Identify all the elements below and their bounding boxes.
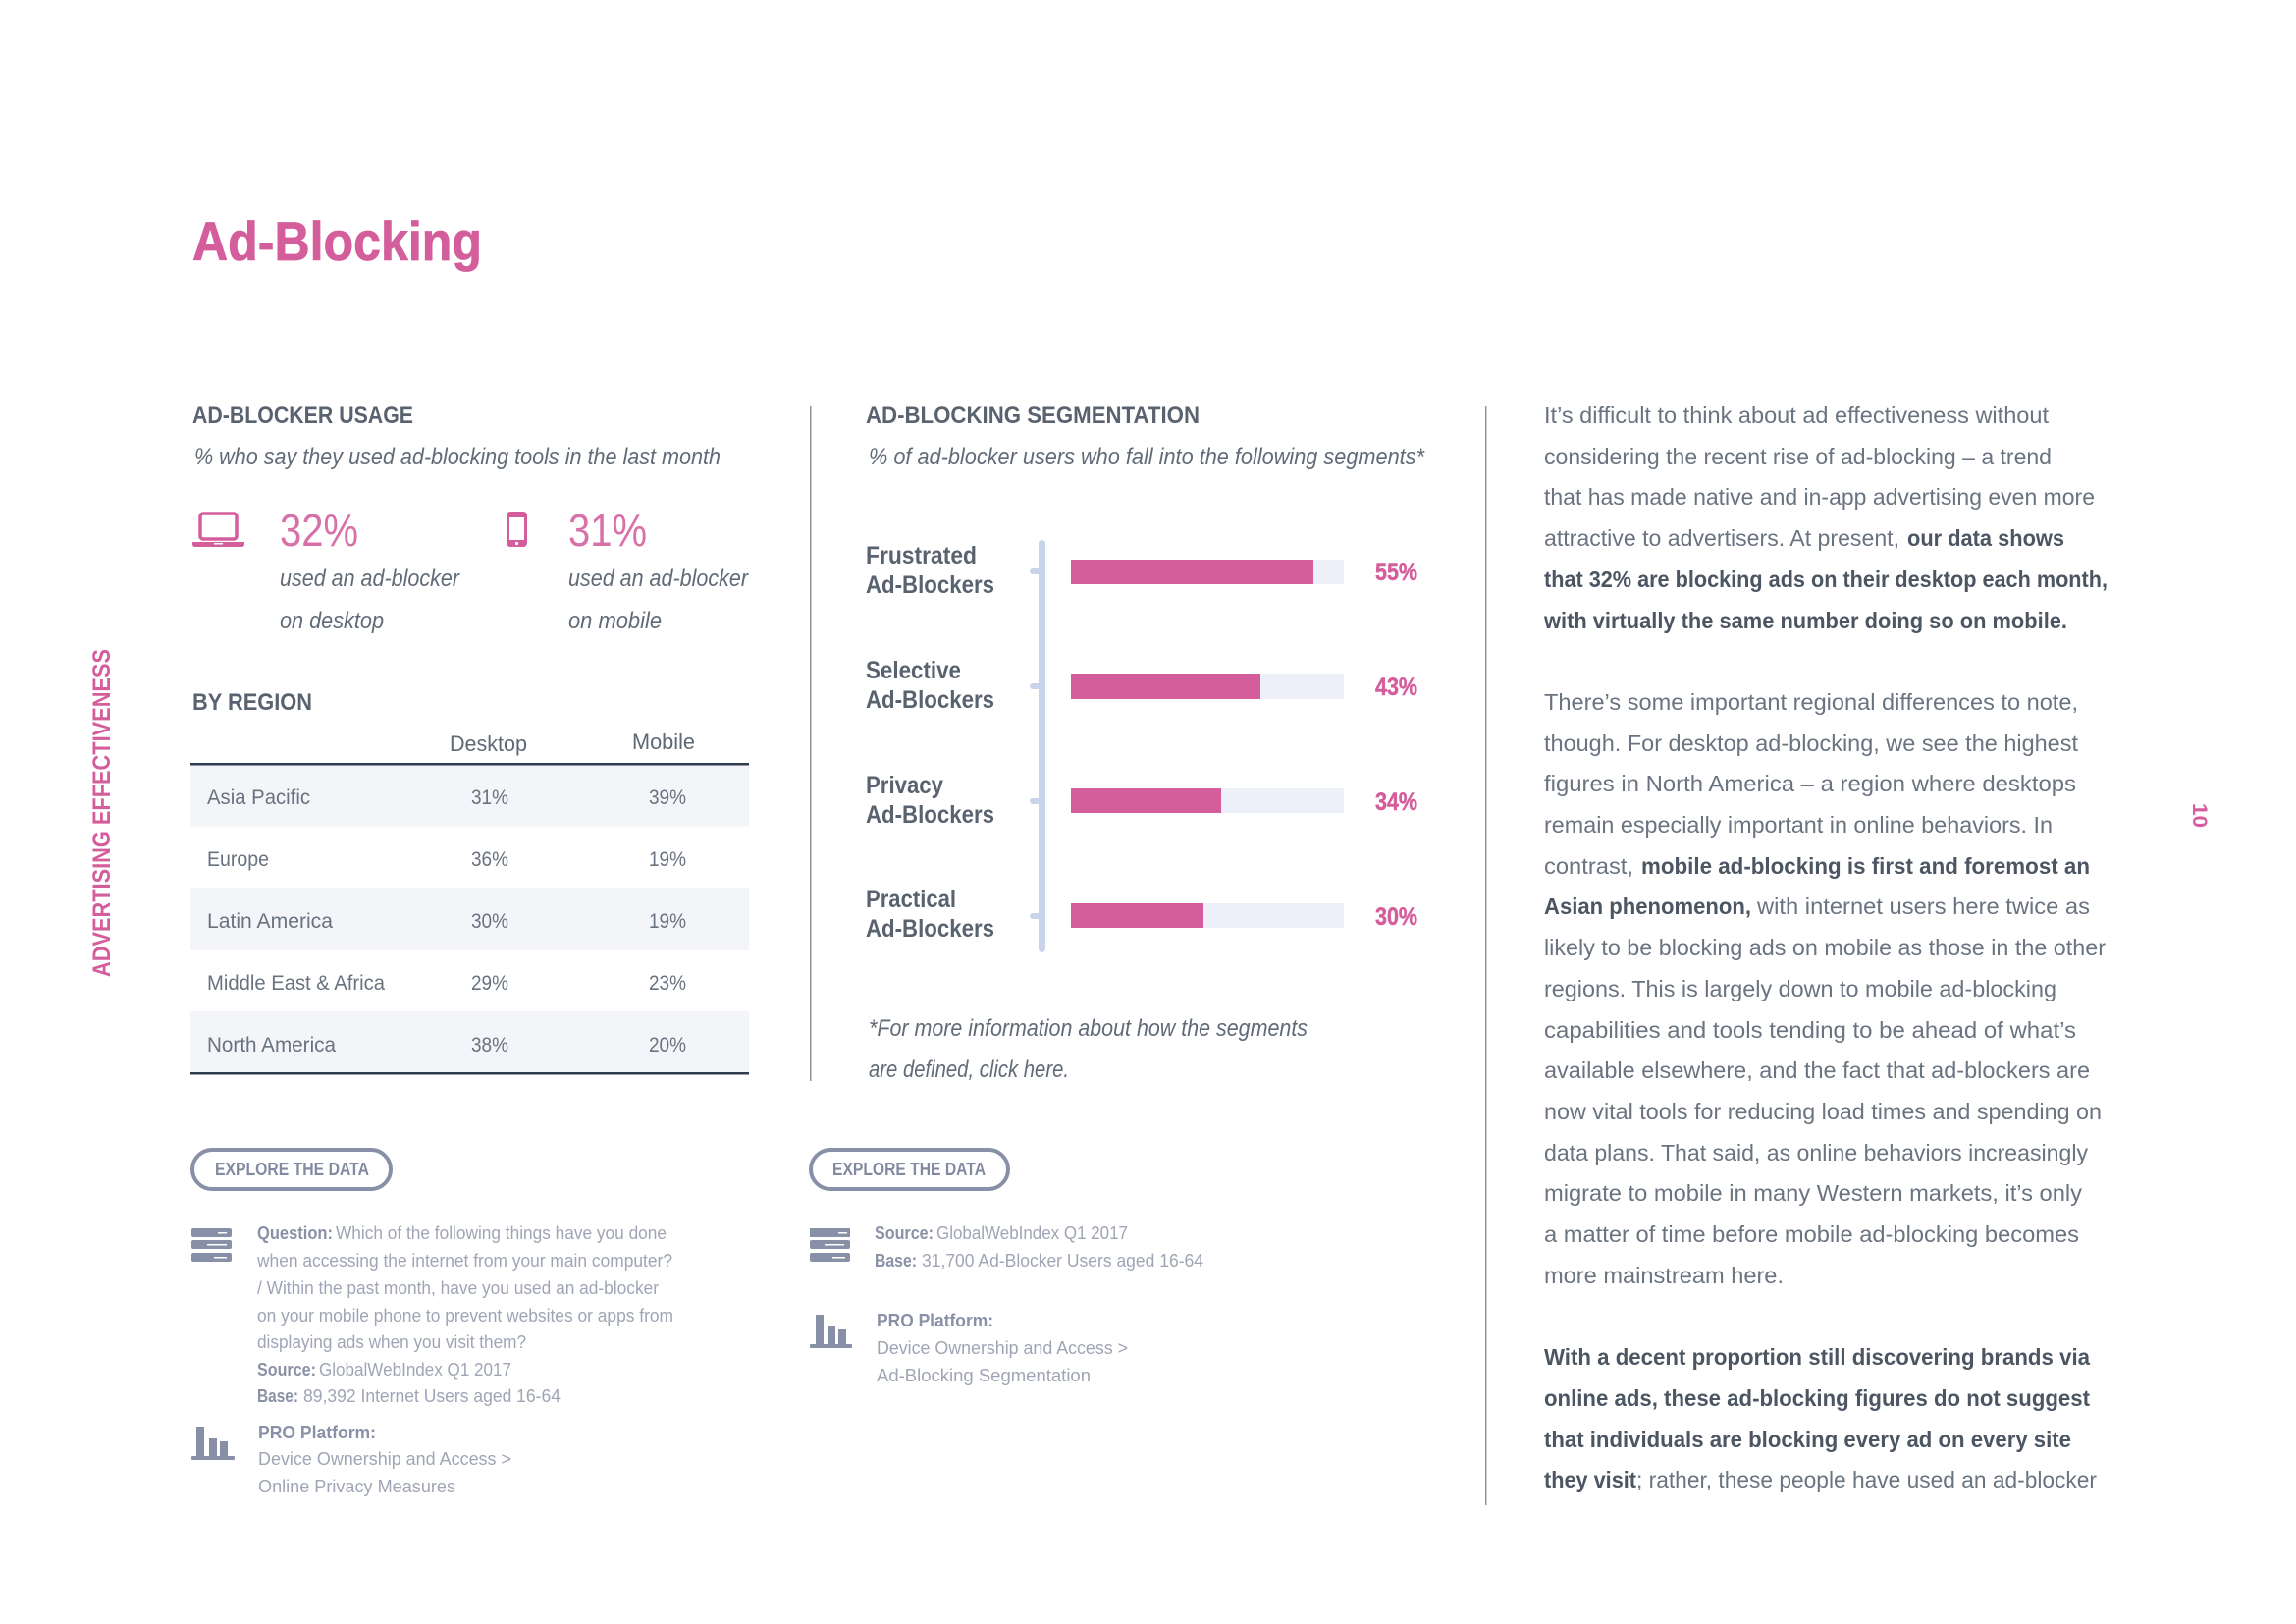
table row: asia pacific: Asia Pacific bbox=[207, 786, 310, 809]
table row: middle east and africa: 29% bbox=[471, 972, 508, 995]
paragraph 1: with virtually the same number doing so on mobile. bbox=[1543, 608, 2067, 633]
text: source and base right: GlobalWebIndex Q1 2017 bbox=[936, 1223, 1128, 1243]
icon: laptop bbox=[192, 514, 244, 547]
icon: mobile phone bbox=[507, 512, 527, 547]
table row: latin america: 19% bbox=[649, 910, 686, 933]
text: source and base right: Source: bbox=[875, 1223, 934, 1243]
table row: europe: 36% bbox=[471, 848, 508, 871]
text: source and base right: Base: bbox=[875, 1251, 917, 1271]
text: question, source and base left: GlobalWebIndex Q1 2017 bbox=[319, 1360, 511, 1380]
table row: latin america: Latin America bbox=[207, 910, 333, 933]
paragraph 2: a matter of time before mobile ad-blocking becomes bbox=[1544, 1221, 2079, 1247]
text: pro platform right bbox=[877, 1311, 1128, 1385]
table row: asia pacific: 39% bbox=[649, 786, 686, 809]
paragraph 1: attractive to advertisers. At present, bbox=[1544, 525, 1899, 551]
text: question, source and base left: Which of the following things have you done bbox=[336, 1223, 667, 1243]
text: question, source and base left: when accessing the internet from your main computer? bbox=[256, 1251, 672, 1271]
paragraph 1: our data shows bbox=[1907, 525, 2064, 551]
heading: ad-blocking segmentation: AD-BLOCKING SEGMENTATION bbox=[866, 403, 1200, 429]
bar: practical ad-blockers 30 percent: Ad-Blockers bbox=[866, 915, 994, 943]
table row: north america bbox=[190, 1011, 749, 1074]
text: source and base right: 31,700 Ad-Blocker Users aged 16-64 bbox=[922, 1251, 1203, 1271]
button: explore the data right bbox=[811, 1150, 1008, 1189]
paragraph 2: remain especially important in online behaviors. In bbox=[1544, 812, 2053, 838]
table header: Mobile bbox=[632, 730, 695, 754]
bar: frustrated ad-blockers 55 percent: Ad-Blockers bbox=[866, 571, 994, 599]
panel: by region table bbox=[190, 689, 749, 1074]
paragraph 1: considering the recent rise of ad-blocking – a trend bbox=[1544, 444, 2052, 469]
text: pro platform right: Device Ownership and Access > bbox=[877, 1338, 1128, 1358]
paragraph 2: likely to be blocking ads on mobile as those in the other bbox=[1544, 935, 2106, 960]
table header: Desktop bbox=[450, 731, 527, 756]
icon: bar chart right bbox=[810, 1315, 852, 1348]
bar: frustrated ad-blockers 55 percent: 55% bbox=[1375, 559, 1417, 586]
subheading: segmentation description: % of ad-blocker users who fall into the following segments* bbox=[869, 444, 1425, 470]
paragraph 2: now vital tools for reducing load times and spending on bbox=[1544, 1099, 2102, 1124]
text: pro platform right: Ad-Blocking Segmentation bbox=[877, 1366, 1091, 1385]
text: pro platform left: Device Ownership and Access > bbox=[258, 1449, 511, 1469]
text: question, source and base left bbox=[256, 1223, 673, 1406]
paragraph 1: that 32% are blocking ads on their desktop each month, bbox=[1544, 567, 2108, 592]
table header bbox=[190, 730, 749, 766]
section label: advertising effectiveness: ADVERTISING EFFECTIVENESS bbox=[88, 649, 116, 977]
paragraph 2: contrast, bbox=[1544, 853, 1633, 879]
paragraph 1: It’s difficult to think about ad effectiveness without bbox=[1544, 403, 2049, 428]
footnote: *For more information about how the segments bbox=[869, 1015, 1308, 1042]
text: source and base right bbox=[875, 1223, 1203, 1271]
table row: latin america bbox=[190, 888, 749, 950]
paragraph 2: data plans. That said, as online behaviors increasingly bbox=[1544, 1140, 2088, 1165]
text: question, source and base left: Base: bbox=[257, 1386, 298, 1406]
text: question, source and base left: 89,392 Internet Users aged 16-64 bbox=[303, 1386, 561, 1406]
text: pro platform left: PRO Platform: bbox=[258, 1423, 376, 1442]
bar chart: segments bbox=[866, 540, 1417, 952]
bar: selective ad-blockers 43 percent: 43% bbox=[1375, 674, 1417, 701]
paragraph 2: regions. This is largely down to mobile ad-blocking bbox=[1544, 976, 2056, 1001]
icon: database left bbox=[191, 1228, 232, 1262]
bar: privacy ad-blockers 34 percent: Privacy bbox=[866, 772, 943, 799]
stat: 32 percent desktop bbox=[280, 505, 460, 634]
icon: database right bbox=[810, 1228, 850, 1262]
table row: asia pacific bbox=[190, 766, 749, 827]
table row: europe: 19% bbox=[649, 848, 686, 871]
paragraph 1 bbox=[1543, 403, 2108, 633]
heading: ad-blocker usage: AD-BLOCKER USAGE bbox=[192, 403, 413, 429]
title: Ad-Blocking bbox=[192, 210, 482, 272]
paragraph 2: more mainstream here. bbox=[1544, 1263, 1784, 1288]
table row: north america: 20% bbox=[649, 1034, 686, 1056]
paragraph 1: that has made native and in-app advertising even more bbox=[1544, 484, 2095, 510]
page number: 10 bbox=[2188, 803, 2211, 828]
bar: selective ad-blockers 43 percent bbox=[866, 657, 1417, 714]
stat: 32 percent desktop: 32% bbox=[280, 505, 358, 556]
paragraph 2: migrate to mobile in many Western markets, it’s only bbox=[1544, 1180, 2082, 1206]
text: question, source and base left: on your mobile phone to prevent websites or apps from bbox=[257, 1306, 673, 1326]
bar: selective ad-blockers 43 percent: Selective bbox=[866, 657, 961, 684]
text: pro platform left: Online Privacy Measures bbox=[258, 1477, 455, 1496]
paragraph 2: Asian phenomenon, bbox=[1544, 893, 1751, 919]
table row: asia pacific: 31% bbox=[471, 786, 508, 809]
stat: 31 percent mobile: 31% bbox=[568, 505, 647, 556]
footnote bbox=[869, 1015, 1308, 1083]
table row: europe bbox=[207, 848, 686, 871]
bar: frustrated ad-blockers 55 percent: Frustrated bbox=[866, 542, 977, 569]
subheading: usage question: % who say they used ad-blocking tools in the last month bbox=[194, 444, 721, 470]
paragraph 2: though. For desktop ad-blocking, we see the highest bbox=[1544, 731, 2078, 756]
bar: frustrated ad-blockers 55 percent bbox=[866, 542, 1417, 599]
table row: north america: 38% bbox=[471, 1034, 508, 1056]
stat: 31 percent mobile bbox=[568, 505, 749, 634]
paragraph 2: There’s some important regional differences to note, bbox=[1544, 689, 2078, 715]
text: question, source and base left: Question: bbox=[257, 1223, 333, 1243]
table row: latin america: 30% bbox=[471, 910, 508, 933]
paragraph 3: they visit bbox=[1544, 1467, 1636, 1492]
button: explore the data left bbox=[192, 1150, 391, 1189]
bar: privacy ad-blockers 34 percent: Ad-Blockers bbox=[866, 801, 994, 829]
panel: ad-blocking segmentation bbox=[866, 403, 1425, 1083]
paragraph 2 bbox=[1544, 689, 2106, 1288]
text: question, source and base left: / Within the past month, have you used an ad-blocker bbox=[257, 1278, 659, 1298]
paragraph 3: online ads, these ad-blocking figures do not suggest bbox=[1544, 1385, 2090, 1411]
stat: 32 percent desktop: on desktop bbox=[280, 608, 384, 634]
paragraph 3: With a decent proportion still discovering brands via bbox=[1544, 1344, 2091, 1370]
paragraph 2: mobile ad-blocking is first and foremost an bbox=[1641, 853, 2090, 879]
bar: practical ad-blockers 30 percent: Practical bbox=[866, 886, 956, 913]
stat: 31 percent mobile: on mobile bbox=[568, 608, 662, 634]
table row: middle east and africa bbox=[207, 972, 686, 995]
button: explore the data right: EXPLORE THE DATA bbox=[832, 1160, 986, 1179]
button: explore the data left: EXPLORE THE DATA bbox=[215, 1160, 369, 1179]
table row: middle east and africa: Middle East & Africa bbox=[207, 972, 385, 995]
heading: by region: BY REGION bbox=[192, 689, 312, 716]
table row: north america: North America bbox=[207, 1034, 336, 1056]
icon: bar chart left bbox=[191, 1427, 235, 1460]
text: question, source and base left: Source: bbox=[257, 1360, 316, 1380]
paragraph 2: available elsewhere, and the fact that ad-blockers are bbox=[1544, 1057, 2090, 1083]
bar: selective ad-blockers 43 percent: Ad-Blockers bbox=[866, 686, 994, 714]
paragraph 2: capabilities and tools tending to be ahead of what’s bbox=[1544, 1017, 2076, 1043]
stat: 31 percent mobile: used an ad-blocker bbox=[568, 566, 749, 592]
text: pro platform right: PRO Platform: bbox=[877, 1311, 993, 1330]
bar: practical ad-blockers 30 percent bbox=[866, 886, 1417, 943]
stat: 32 percent desktop: used an ad-blocker bbox=[280, 566, 460, 592]
paragraph 2: figures in North America – a region where desktops bbox=[1544, 771, 2076, 796]
text: question, source and base left: displaying ads when you visit them? bbox=[257, 1332, 526, 1352]
panel: ad-blocker usage bbox=[192, 403, 749, 634]
paragraph 3: ; rather, these people have used an ad-blocker bbox=[1636, 1467, 2097, 1492]
paragraph 3: that individuals are blocking every ad on every site bbox=[1544, 1427, 2071, 1452]
bar: practical ad-blockers 30 percent: 30% bbox=[1375, 903, 1417, 931]
text: pro platform left bbox=[258, 1423, 511, 1496]
panel: body text column bbox=[1543, 403, 2108, 1492]
paragraph 3 bbox=[1544, 1344, 2097, 1492]
footnote: are defined, click here. bbox=[869, 1056, 1069, 1083]
paragraph 2: with internet users here twice as bbox=[1756, 893, 2090, 919]
axis bbox=[1030, 540, 1045, 952]
bar: privacy ad-blockers 34 percent: 34% bbox=[1375, 788, 1417, 816]
table row: europe: Europe bbox=[207, 848, 269, 871]
bar: privacy ad-blockers 34 percent bbox=[866, 772, 1417, 829]
table row: middle east and africa: 23% bbox=[649, 972, 686, 995]
